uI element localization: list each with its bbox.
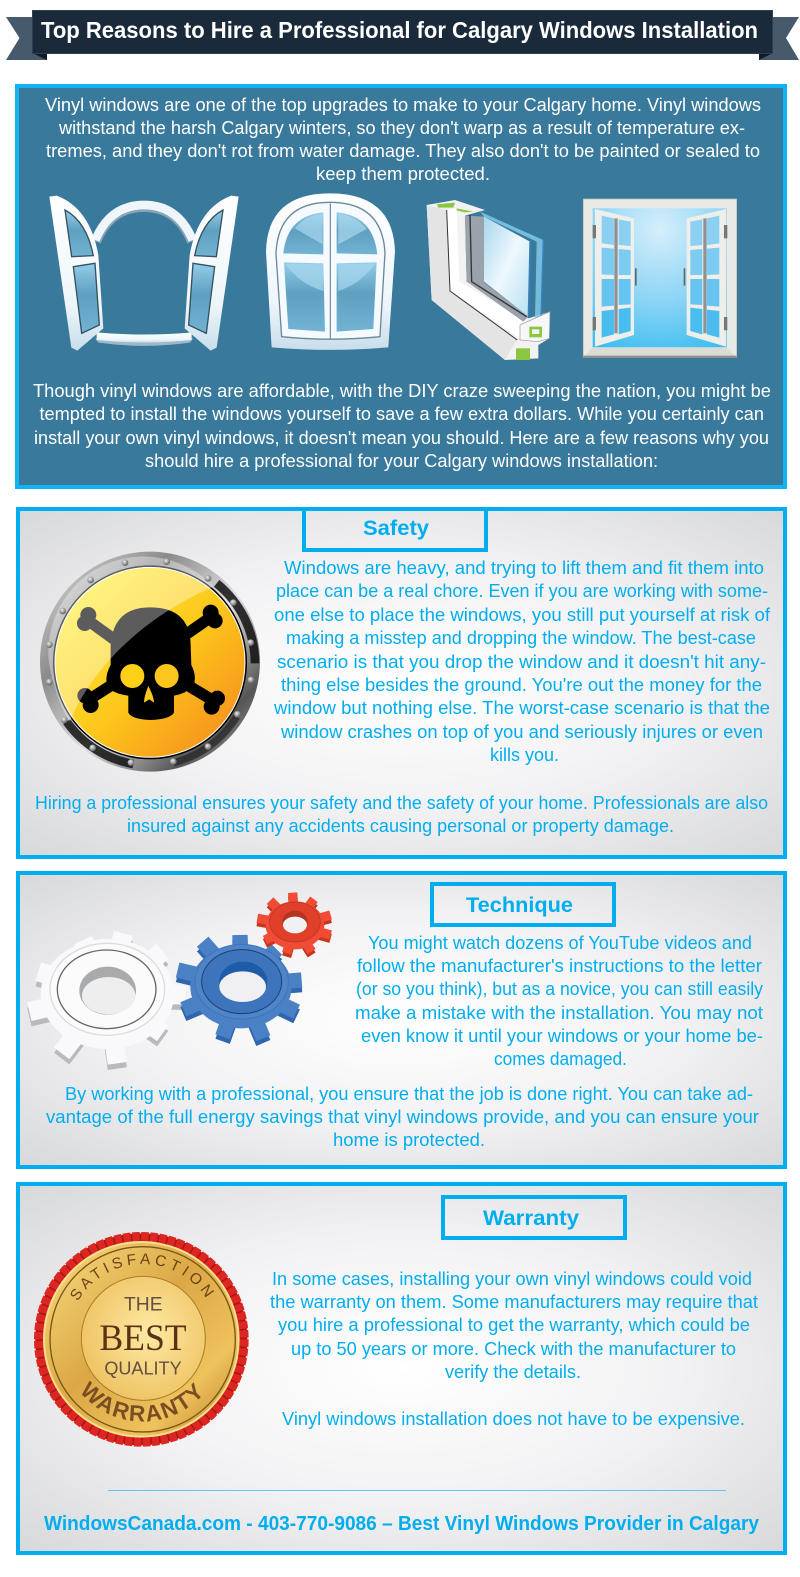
safety body text: thing else besides the ground. You're out the money for the	[281, 675, 762, 695]
icon: gears	[29, 893, 331, 1069]
safety body text: one else to place the windows, you still put yourself at risk of	[274, 605, 771, 625]
safety body text: insured against any accidents causing personal or property damage.	[127, 816, 674, 836]
technique body text: even know it until your windows or your home be-	[361, 1026, 763, 1046]
intro paragraph 2: Though vinyl windows are affordable, with the DIY craze sweeping the nation, you might be	[33, 381, 771, 401]
icon: satisfaction warranty seal: SATISFACTION	[70, 1254, 214, 1300]
panel: safety	[18, 509, 785, 857]
intro paragraph 1: Vinyl windows are one of the top upgrades to make to your Calgary home. Vinyl windows	[45, 95, 761, 115]
warranty body text: Vinyl windows installation does not have to be expensive.	[282, 1409, 745, 1429]
heading: warranty	[443, 1197, 625, 1238]
warranty body text	[270, 1269, 758, 1429]
blue gear	[178, 935, 302, 1043]
icon: satisfaction warranty seal	[34, 1232, 249, 1447]
safety body text: kills you.	[490, 745, 559, 765]
intro paragraph 2: tempted to install the windows yourself to save a few extra dollars. While you certainly can	[40, 404, 764, 424]
icon: open window with sky	[583, 199, 737, 358]
intro paragraph 2: should hire a professional for your Calgary windows installation:	[145, 451, 658, 471]
icon: skull warning badge	[40, 552, 260, 772]
intro paragraph 2	[33, 381, 771, 471]
safety body text: window but nothing else. The worst-case scenario is that the	[273, 698, 770, 718]
technique body text	[46, 933, 763, 1150]
intro paragraph 2: install your own vinyl windows, it doesn't mean you should. Here are a few reasons why you	[34, 428, 769, 448]
warranty body text: you hire a professional to get the warranty, which could be	[278, 1315, 750, 1335]
technique body text: home is protected.	[333, 1130, 485, 1150]
technique body text: follow the manufacturer's instructions to the letter	[357, 956, 762, 976]
safety body text: Windows are heavy, and trying to lift them and fit them into	[284, 558, 764, 578]
icon: satisfaction warranty seal: BEST	[99, 1318, 187, 1359]
heading: warranty: Warranty	[483, 1207, 579, 1230]
safety body text: place can be a real chore. Even if you are working with some-	[276, 581, 768, 601]
heading: technique	[432, 884, 614, 925]
icon: satisfaction warranty seal: THE	[124, 1295, 163, 1316]
footer contact line: WindowsCanada.com - 403-770-9086 – Best Vinyl Windows Provider in Calgary	[44, 1513, 760, 1535]
warranty body text: verify the details.	[445, 1362, 581, 1382]
icon: open arched window	[49, 196, 239, 351]
panel: technique	[18, 873, 785, 1167]
intro paragraph 1: tremes, and they don't rot from water damage. They also don't to be painted or sealed to	[46, 141, 760, 161]
banner title: Top Reasons to Hire a Professional for Calgary Windows Installation	[41, 17, 758, 43]
technique body text: make a mistake with the installation. You may not	[355, 1003, 763, 1023]
technique body text: By working with a professional, you ensure that the job is done right. You can take ad-	[65, 1084, 753, 1104]
intro paragraph 1: keep them protected.	[316, 164, 490, 184]
warranty body text: the warranty on them. Some manufacturers may require that	[270, 1292, 758, 1312]
technique body text: comes damaged.	[494, 1049, 627, 1069]
warranty body text: up to 50 years or more. Check with the manufacturer to	[291, 1339, 736, 1359]
icon: satisfaction warranty seal: QUALITY	[104, 1357, 182, 1378]
heading: safety: Safety	[363, 517, 429, 540]
icon: vinyl window cross-section	[427, 200, 550, 360]
intro paragraph 1: withstand the harsh Calgary winters, so they don't warp as a result of temperature ex-	[58, 118, 745, 138]
technique body text: You might watch dozens of YouTube videos and	[368, 933, 752, 953]
technique body text: (or so you think), but as a novice, you can still easily	[356, 979, 763, 999]
warranty body text: In some cases, installing your own vinyl windows could void	[272, 1269, 752, 1289]
panel: warranty	[16, 1182, 787, 1555]
safety body text: scenario is that you drop the window and it doesn't hit any-	[277, 652, 766, 672]
heading: technique: Technique	[466, 894, 573, 917]
safety body text: window crashes on top of you and seriously injures or even	[280, 722, 763, 742]
white gear	[29, 933, 186, 1069]
safety body text: making a misstep and dropping the window. The best-case	[286, 628, 756, 648]
icon: closed arched window	[266, 193, 395, 350]
panel: introduction	[17, 86, 785, 487]
red gear	[257, 893, 331, 957]
safety body text	[35, 558, 771, 836]
safety body text: Hiring a professional ensures your safety and the safety of your home. Professionals are also	[35, 793, 768, 813]
icon: satisfaction warranty seal: WARRANTY	[82, 1380, 201, 1422]
banner title	[6, 10, 799, 60]
technique body text: vantage of the full energy savings that vinyl windows provide, and you can ensure your	[46, 1107, 759, 1127]
intro paragraph 1	[45, 95, 761, 184]
heading: safety	[304, 509, 486, 550]
